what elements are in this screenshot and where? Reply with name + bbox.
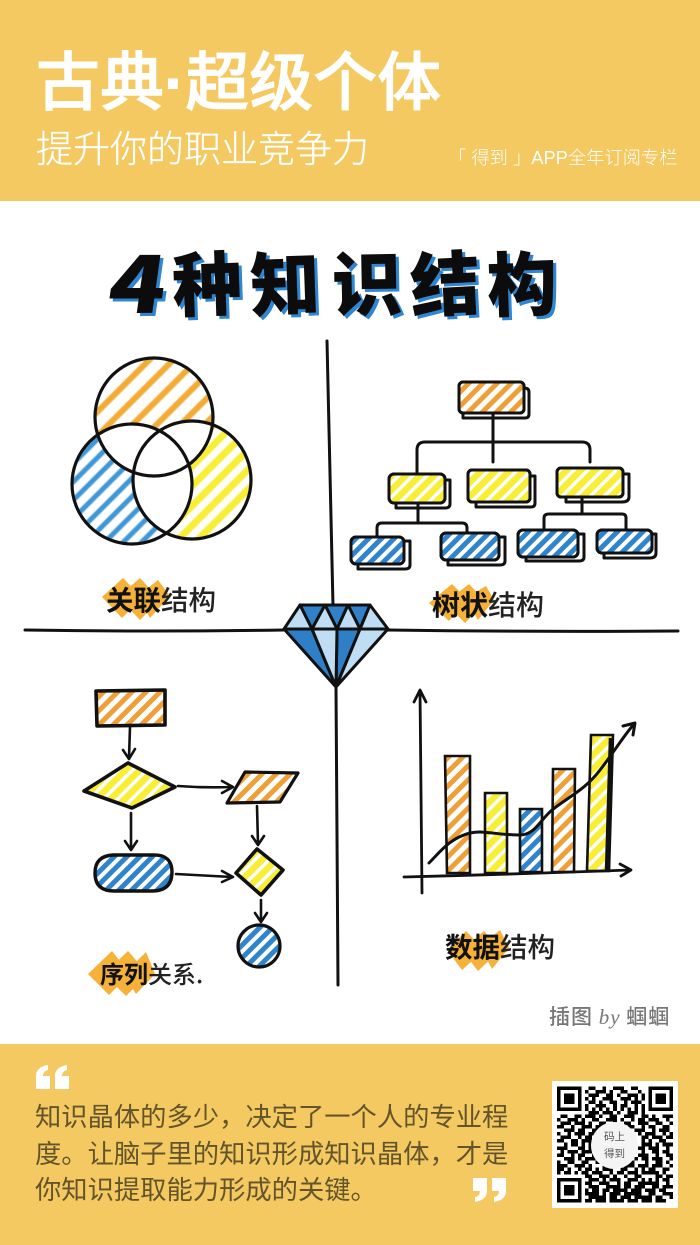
flow node: decision diamond bbox=[84, 763, 175, 808]
panel: data structure bar chart bbox=[404, 690, 635, 893]
QR center badge: 得到 bbox=[604, 1146, 625, 1161]
label: data structure: 数据结构 bbox=[445, 925, 555, 965]
label: sequence relation bbox=[88, 951, 203, 996]
tree node: root bbox=[459, 382, 529, 418]
heading: 4 knowledge structures: 识 bbox=[331, 229, 403, 332]
panel: header band bbox=[0, 0, 700, 201]
QR code bbox=[552, 1081, 678, 1208]
flow node: small diamond bbox=[236, 849, 283, 895]
venn outlines bbox=[72, 358, 251, 544]
bars bbox=[445, 735, 613, 873]
heading: 4 knowledge structures: 种 bbox=[170, 229, 244, 332]
QR center badge bbox=[591, 1122, 638, 1169]
axes bbox=[404, 690, 631, 893]
heading: 4 knowledge structures: 构 bbox=[485, 229, 559, 332]
tree nodes: level two bbox=[389, 468, 629, 508]
QR modules bbox=[557, 1086, 673, 1202]
label: association structure: 关联结构 bbox=[106, 578, 216, 618]
flow node: parallelogram bbox=[227, 772, 298, 803]
panel: quote footer bbox=[0, 1044, 700, 1245]
trend arrow bbox=[429, 723, 635, 863]
quote text: 你知识提取能力形成的关键。 bbox=[35, 1168, 377, 1207]
flow node: start rectangle bbox=[96, 690, 165, 726]
heading: 4 knowledge structures: 4 bbox=[102, 224, 175, 336]
tree nodes: level three bbox=[351, 530, 656, 569]
icon: central diamond bbox=[284, 605, 388, 687]
quote text bbox=[35, 1095, 508, 1207]
flow node: rounded pill bbox=[95, 855, 172, 891]
column source note: 「 得到 」APP全年订阅专栏 bbox=[448, 147, 678, 168]
tree connectors bbox=[377, 414, 626, 537]
quote text: 知识晶体的多少，决定了一个人的专业程 bbox=[35, 1095, 508, 1134]
venn fills bbox=[73, 359, 250, 543]
icon: opening quote mark bbox=[36, 1065, 69, 1089]
QR center badge: 码上 bbox=[604, 1129, 625, 1144]
panel: sequence relation flowchart bbox=[84, 690, 298, 967]
heading: 4 knowledge structures: 结 bbox=[407, 228, 483, 333]
flow arrows bbox=[123, 727, 267, 922]
label: tree structure: 树状结构 bbox=[432, 584, 544, 624]
heading: 4 knowledge structures bbox=[102, 224, 559, 336]
illustrator credit: 插图 by 蝈蝈 bbox=[549, 1001, 670, 1031]
subtitle: 提升你的职业竞争力 bbox=[36, 119, 369, 173]
heading: 4 knowledge structures: 知 bbox=[248, 229, 322, 332]
heading: main title: 古典·超级个体 bbox=[36, 32, 441, 124]
icon: closing quote mark bbox=[473, 1178, 506, 1202]
flow node: end circle bbox=[238, 925, 280, 967]
panel: tree structure bbox=[351, 382, 656, 569]
diagram illustration bbox=[24, 340, 680, 1028]
quote text: 度。让脑子里的知识形成知识晶体，才是 bbox=[35, 1132, 508, 1171]
label: sequence relation: 序列关系. bbox=[100, 955, 203, 990]
quadrant axes bbox=[25, 341, 678, 985]
panel: association structure venn bbox=[72, 358, 251, 620]
